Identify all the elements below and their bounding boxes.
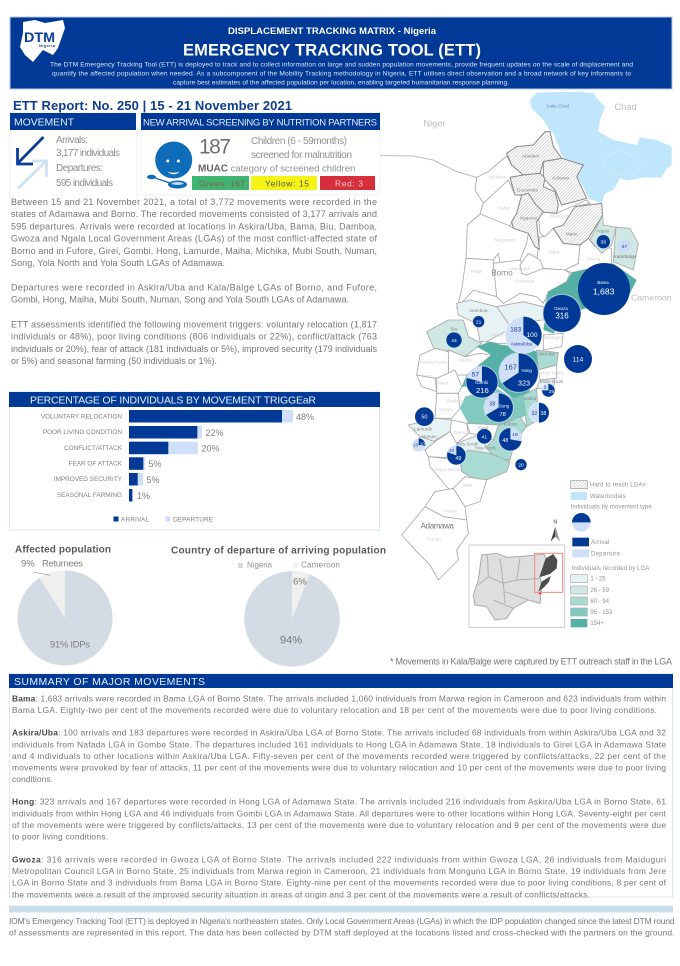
- circle: Fufore: [499, 428, 522, 451]
- circle: Damboa: [473, 316, 484, 327]
- LGA labels: Gubio: [498, 205, 511, 210]
- summary: Askira/Uba: conditions.: [12, 774, 53, 784]
- circle: Fufore: 48: [502, 438, 508, 444]
- row: poor living condition: POOR LIVING CONDITION: [43, 429, 122, 436]
- LGA labels: [426, 153, 637, 542]
- LGA labels: Jere: [527, 253, 537, 258]
- map: Borno and Adamawa: Numan: [422, 434, 437, 439]
- LGA labels: Kala/Balge: [614, 254, 637, 259]
- summary: Hong: of the movements were were triggered by conflicts/attacks, 13 per cent of the movements were due to voluntary relocation and 9 per cent of the movements were due: [12, 820, 666, 830]
- map: Borno and Adamawa: Damboa: [470, 308, 488, 313]
- map: Borno and Adamawa: Hawul: [459, 358, 471, 363]
- circle: Yola North: 20: [518, 462, 524, 467]
- body text: overview: Between 15 and 21 November 2021, a total of 3,772 movements were recorded in the: [11, 197, 377, 207]
- summary: Askira/Uba: movements were provoked by fear of attacks, 11 per cent of the movements were due to voluntary relocation and 10 per cent of the movements were due to poor living: [12, 762, 666, 772]
- body text: triggers: or 5%) and seasonal farming (50 individuals or 1%).: [11, 356, 217, 366]
- row: conflict/attack: [64, 442, 220, 454]
- 6% label: 6%: [293, 576, 307, 588]
- row: improved security: [54, 473, 160, 486]
- map: Borno and Adamawa: Guyuk: [439, 407, 453, 412]
- circle: Maiha: [529, 403, 549, 423]
- circle: Yola South: [447, 446, 466, 465]
- circle: Kala/Balge: [618, 239, 631, 253]
- map: Borno and Adamawa: Shani: [436, 380, 448, 385]
- circle: Ngala: [597, 235, 610, 248]
- map: Borno and Adamawa: Yola North: [474, 445, 496, 450]
- circle: Numan: [412, 438, 425, 452]
- circle: Song: 38: [489, 402, 495, 408]
- circle: Askira/Uba: [505, 317, 542, 353]
- screened caption: Children (6 - 59months): [251, 136, 347, 147]
- row: voluntary relocation: 48%: [296, 412, 314, 422]
- IDPs label: 91% IDPs: [50, 640, 90, 650]
- row: seasonal farming: [57, 489, 150, 502]
- badge: yellow: [251, 176, 317, 190]
- circle: Yola South: 10: [449, 448, 455, 453]
- LGA labels: Kaga: [471, 269, 483, 274]
- place labels: [421, 102, 672, 530]
- circle: Hong: [499, 353, 538, 392]
- chart legend: ARRIVAL: [121, 516, 149, 524]
- LGA labels: Marte: [566, 232, 578, 237]
- summary: Gwoza: LGA in Borno State and 3 individuals from Bama LGA in Borno State. Eighty-nine per cent of the movements recorded were due to poor living conditions, 8 per cent of: [12, 878, 667, 888]
- LGA labels: Mobbar: [489, 174, 506, 179]
- map: Borno and Adamawa: Jada: [462, 482, 472, 487]
- row: voluntary relocation: [41, 410, 314, 422]
- circle: Gombi: [466, 366, 498, 398]
- panel: country of departure pie: [171, 546, 386, 667]
- pie heading: Affected population: [15, 544, 111, 556]
- central and southern LGAs: [408, 300, 567, 502]
- badge: green: Green: 167: [199, 178, 245, 188]
- place labels: Niger: [423, 119, 446, 129]
- legend: individuals by LGA: 154+: [590, 621, 604, 627]
- report title: ETT Report: No. 250 | 15 - 21 November 2021: [13, 98, 292, 113]
- circle: Biu: 44: [451, 338, 457, 344]
- summary: Hong: [12, 797, 667, 842]
- row: improved security: IMPROVED SECURITY: [54, 476, 123, 483]
- footer note: of assessments are represented in this report. The data has been collected by DTM staff deployed at the locations listed and cross-checked with the partners on the ground.: [9, 927, 674, 937]
- place labels: Chad: [614, 102, 637, 112]
- circle: Michika: 114: [573, 357, 584, 364]
- map: Borno and Adamawa: Girei: [478, 425, 488, 430]
- row: fear of attack: [69, 457, 162, 470]
- summary: Gwoza: [12, 854, 667, 899]
- map footnote: * Movements in Kala/Balge were captured by ETT outreach staff in the LGA: [390, 656, 672, 666]
- circle: Mubi South: 29: [549, 389, 554, 394]
- panel: summary of major movements: [9, 674, 673, 899]
- summary: Askira/Uba: individuals from Nafada LGA in Gombe State. The departures included 161 individuals to Hong LGA in Adamawa State, 18 individuals to Girei LGA in Adamawa State: [12, 739, 666, 749]
- panel: movement trigger bar chart: [9, 392, 380, 530]
- screened caption: screened for malnutrition: [251, 150, 352, 161]
- circle: Gwoza: 316: [555, 311, 569, 320]
- returnees label: [21, 558, 83, 570]
- body text: overview: 595 departures. Arrivals were recorded at locations in Askira/Uba, Bama, Biu, Damboa,: [11, 221, 377, 231]
- header banner: [10, 17, 672, 89]
- LGA labels: Maiduguri: [510, 266, 530, 271]
- LGA labels: Dikwa: [588, 256, 601, 261]
- circle: Damboa: 21: [476, 320, 482, 326]
- map: Borno and Adamawa: [380, 92, 672, 580]
- body text: overview: [11, 197, 377, 268]
- circle: Fufore: 19: [512, 432, 518, 438]
- icon: arrival arrow: [18, 137, 44, 164]
- panel: affected population pie: [15, 544, 112, 666]
- chart heading: PERCENTAGE OF INDIVIDUALS BY MOVEMENT TRIGGEaR: [30, 394, 316, 406]
- legend: individuals by LGA: 60 - 94: [590, 599, 610, 605]
- legend: individuals by LGA: 1 - 25: [590, 577, 606, 583]
- row: fear of attack: 5%: [148, 459, 162, 469]
- circle: Girei: 41: [482, 434, 487, 440]
- place labels: Lake Chad: [547, 104, 570, 109]
- summary: Hong: to poor living conditions.: [12, 832, 108, 842]
- pie chart: [244, 571, 340, 667]
- row: fear of attack: FEAR OF ATTACK: [69, 460, 123, 468]
- icon: child face and spoon: [147, 142, 192, 188]
- summary: Hong: Hong: 323 arrivals and 167 departures were recorded in Hong LGA of Adamawa State. The arrivals included 216 individuals from Askira/Uba LGA in Borno State, 61: [12, 797, 666, 807]
- pie legend: Nigeria: [247, 560, 273, 570]
- body text: overview: states of Adamawa and Borno. The recorded movements consisted of 3,177 arrivals and: [11, 209, 377, 219]
- summary: Askira/Uba: Askira/Uba: 100 arrivals and 183 departures were recorded in Askira/Uba LGA of Borno State. The arrivals included 68 individuals from within Askira/Uba LGA and 32: [12, 728, 666, 738]
- summary: Askira/Uba: and 4 individuals to other locations within Askira/Uba LGA. Fifty-seven per cent of the movements recorded were triggered by conflicts/attacks, 22 per cent of the: [12, 751, 666, 761]
- screened count: 187: [199, 136, 231, 158]
- footer note: IOM's Emergency Tracking Tool (ETT) is deployed in Nigeria's northeastern states. Only Local Government Areas (LGAs) in which the IDP population changed since the latest DTM round: [9, 916, 675, 926]
- chart legend: DEPARTURE: [173, 516, 213, 524]
- LGA labels: Kukawa: [552, 176, 569, 181]
- legend: individuals by LGA: [571, 566, 649, 627]
- circle: Biu: [446, 332, 462, 348]
- summary: Bama: Bama: 1,683 arrivals were recorded in Bama LGA of Borno State. The arrivals included 1,060 individuals from Marwa region in Cameroon and 623 individuals from within: [12, 693, 666, 703]
- map: Borno and Adamawa: Yola South: [456, 442, 479, 447]
- screened caption: [251, 136, 352, 161]
- body text: overview: Borno and in Fufore, Girei, Gombi, Hong, Lamurde, Maiha, Michika, Mubi South, Numan,: [11, 246, 377, 256]
- badge: red: Red: 3: [335, 178, 363, 188]
- map: Borno and Adamawa: Madagali: [544, 335, 563, 340]
- header kicker: DISPLACEMENT TRACKING MATRIX - Nigeria: [228, 26, 437, 37]
- place labels: Borno: [491, 269, 513, 278]
- chart legend: [114, 516, 213, 524]
- circle: Hong: Hong: [521, 368, 532, 373]
- icon: north arrow: [551, 520, 560, 541]
- legend: movement type: Departure: [591, 551, 621, 557]
- badge: green: [192, 176, 249, 190]
- LGA labels: Mafa: [549, 250, 560, 255]
- circle: Gombi: 57: [472, 371, 479, 378]
- circle: Maiha: 32: [531, 411, 537, 417]
- map: Borno and Adamawa: Mayo-Belwa: [435, 467, 461, 472]
- body text: departures: Departures were recorded in Askira/Uba and Kala/Balge LGAs of Borno, and Fufore,: [11, 282, 377, 292]
- circle: Song: [484, 393, 513, 422]
- circle: Askira/Uba: 183: [510, 327, 522, 334]
- icon: north arrow: N: [553, 520, 557, 526]
- summary: Bama: [12, 693, 666, 715]
- LGA labels: Mongunu: [550, 214, 570, 219]
- circle: Mubi South: [542, 384, 555, 397]
- summary: Gwoza: Gwoza: 316 arrivals were recorded in Gwoza LGA of Borno State. The arrivals included 222 individuals from within Gwoza LGA, 26 individuals from Maiduguri: [12, 854, 666, 864]
- circle: Askira/Uba: Askira/Uba: [511, 342, 533, 347]
- badge: yellow: Yellow: 15: [265, 178, 309, 188]
- map: Borno and Adamawa: Chibok: [489, 332, 505, 337]
- intro text: The DTM Emergency Tracking Tool (ETT) is deployed to track and to collect information on large and sudden population movements, provide frequent updates on the scale of displacement and: [50, 62, 633, 68]
- circle: Bama: Bama: [597, 280, 609, 285]
- circle: Numan: 10: [413, 442, 419, 447]
- map: Borno and Adamawa: Mubi North: [540, 371, 563, 376]
- circle: Bama: 1,683: [593, 287, 615, 297]
- legend: hard to reach: [571, 481, 646, 489]
- footer note: [9, 916, 675, 937]
- proportional movement circles: [412, 235, 631, 470]
- LGA labels: Abadam: [522, 153, 539, 158]
- legend: individuals by LGA: Individuals recorded by LGA: [572, 566, 649, 572]
- southern Adamawa LGAs: [402, 477, 487, 580]
- circle: Yola North: [515, 459, 527, 470]
- panel: movement: [10, 113, 137, 201]
- circle: Kala/Balge: 37: [622, 244, 627, 250]
- LGA labels: Nganzai: [520, 215, 537, 220]
- body text: triggers: individuals or 48%), poor living conditions (806 individuals or 22%), conflict/attack (763: [11, 332, 377, 342]
- body text: triggers: individuals or 20%), fear of attack (181 individuals or 5%), improved security (179 individuals: [11, 344, 378, 354]
- movement figures: Departures:: [56, 163, 103, 174]
- circle: Gwoza: Gwoza: [554, 306, 568, 311]
- inset map of Nigeria: [469, 545, 565, 627]
- circle: Lamurde: [415, 407, 434, 426]
- row: seasonal farming: 1%: [137, 491, 150, 501]
- place labels: Cameroon: [631, 292, 672, 302]
- summary: Gwoza: the movements were a result of the improved security situation in areas of origin and 3 per cent of the movements were a result of conflicts/attacks.: [12, 889, 590, 899]
- LGA labels: Konduga: [516, 278, 535, 283]
- main title: EMERGENCY TRACKING TOOL (ETT): [183, 42, 481, 60]
- LGA labels: Guzamala: [517, 187, 538, 192]
- summary heading: SUMMARY OF MAJOR MOVEMENTS: [14, 676, 205, 688]
- intro text: capture best estimates of the affected population per location, enabling targeted humanitarian response planning.: [173, 80, 509, 86]
- circle: Girei: [477, 429, 492, 444]
- legend: movement type: Individuals by movement type: [571, 505, 652, 511]
- summary: Askira/Uba: [12, 728, 666, 784]
- logo: DTM Nigeria: Nigeria: [39, 43, 56, 48]
- intro text: quantify the affected population when needed. As a subcomponent of the Mobility Tracking methodology in Nigeria, ETT utilises direct observation and a broad network of key informants to: [52, 70, 631, 78]
- map legend: [469, 481, 652, 627]
- logo: DTM Nigeria: DTM: [24, 29, 55, 45]
- legend: hard to reach: Hard to reach LGAs: [590, 483, 646, 489]
- circle: Lamurde: 50: [421, 415, 427, 421]
- body text: departures: [11, 282, 377, 305]
- map: Borno and Adamawa: Demsa: [454, 430, 469, 435]
- movement figures: 3,177 individuals: [56, 148, 120, 159]
- map: Borno and Adamawa: Kwaya Kusar: [420, 359, 447, 364]
- intro text: [50, 62, 633, 86]
- lake chad and northern LGAs: [380, 92, 672, 310]
- circle: Michika: [564, 345, 592, 373]
- circle: Gombi: 216: [476, 386, 489, 395]
- circle: Bama: [578, 263, 630, 315]
- pie legend: Cameroon: [301, 560, 340, 570]
- movement figures: [56, 135, 120, 189]
- legend: individuals by LGA: 26 - 59: [590, 588, 610, 594]
- row: improved security: 5%: [146, 475, 160, 485]
- body text: overview: Song, Yola North and Yola South LGAs of Adamawa.: [11, 258, 225, 268]
- circle: Gwoza: [543, 294, 581, 332]
- legend: waterbodies: Waterbodies: [590, 494, 626, 500]
- circle: Hong: 167: [505, 363, 517, 372]
- circle: Ngala: 36: [601, 240, 606, 246]
- map: Borno and Adamawa: Ganye: [443, 508, 458, 513]
- summary: Gwoza: Metropolitan Council LGA in Borno State, 25 individuals from Marwa region in Cameroon, 21 individuals from Monguno LGA in Borno State, 19 individuals from Jere: [12, 866, 666, 876]
- circle: Askira/Uba: 100: [526, 332, 538, 339]
- circle: Mubi South: 9: [544, 385, 547, 390]
- returnees label: Returnees: [42, 558, 83, 570]
- circle: Maiha: 38: [540, 411, 546, 417]
- returnees label: 9%: [21, 558, 35, 570]
- summary: Hong: individuals from within Hong LGA and 46 individuals from Gombi LGA in Adamawa State. All departures were to other locations within Hong LGA. Seventy-eight per cent: [12, 808, 667, 818]
- map: Borno and Adamawa: Lamurde: [414, 426, 433, 431]
- 94% label: 94%: [280, 634, 302, 646]
- circle: Song: 78: [500, 412, 506, 418]
- LGA labels: Magumeri: [495, 238, 515, 243]
- map: Borno and Adamawa: Maiha: [524, 396, 537, 401]
- logo: DTM Nigeria: [20, 20, 65, 62]
- circle: Yola South: 49: [455, 456, 461, 462]
- body text: triggers: ETT assessments identified the following movement triggers: voluntary relocation (1,817: [11, 320, 377, 330]
- LGA labels: Toungo: [426, 537, 441, 542]
- nutrition heading: NEW ARRIVAL SCREENING BY NUTRITION PARTNERS: [143, 118, 377, 128]
- map: Borno and Adamawa: Bayo: [421, 374, 432, 379]
- map: Borno and Adamawa: Shelleng: [446, 399, 464, 404]
- badge: red: [320, 176, 375, 190]
- pie heading: Country of departure of arriving population: [171, 546, 386, 556]
- legend: movement type: [571, 505, 652, 557]
- map: Borno and Adamawa: Michika: [539, 351, 555, 356]
- row: poor living condition: 22%: [206, 428, 224, 438]
- movement heading: MOVEMENT: [14, 116, 75, 128]
- circle: Hong: 323: [518, 378, 530, 387]
- icon: departure arrow: [18, 161, 46, 188]
- row: poor living condition: [43, 426, 224, 438]
- row: seasonal farming: SEASONAL FARMING: [57, 492, 122, 499]
- row: conflict/attack: 20%: [202, 444, 220, 454]
- row: voluntary relocation: VOLUNTARY RELOCATION: [41, 414, 122, 420]
- body text: departures: Gombi, Hong, Maiha, Mubi South, Numan, Song and Yola South LGAs of Adamawa.: [11, 295, 349, 305]
- map: Borno and Adamawa: Fufore: [504, 421, 517, 426]
- MUAC caption: MUAC category of screened children: [198, 164, 355, 174]
- map: Borno and Adamawa: Mubi South: [540, 379, 564, 384]
- LGA labels: Ngala: [597, 229, 610, 234]
- panel: nutrition screening: [141, 113, 380, 195]
- row: conflict/attack: CONFLICT/ATTACK: [64, 445, 123, 452]
- divider band: [9, 906, 673, 912]
- movement figures: 595 individuals: [56, 178, 113, 189]
- legend: movement type: Arrival: [591, 540, 609, 546]
- place labels: Adamawa: [421, 521, 455, 530]
- circle: Gombi: Gombi: [475, 380, 488, 385]
- summary: Bama: Bama LGA. Eighty-two per cent of the movements recorded were due to voluntary relocation and 18 per cent of the movements were due to poor living conditions.: [12, 705, 657, 715]
- circle: Song: Song: [499, 404, 510, 409]
- body text: overview: Gwoza and Ngala Local Government Areas (LGAs) of the most conflict-affected state of: [11, 234, 377, 244]
- pie legend: [238, 560, 340, 570]
- circle: Numan: 10: [420, 442, 425, 447]
- body text: triggers: [11, 320, 378, 366]
- legend: individuals by LGA: 95 - 153: [590, 610, 613, 616]
- legend: waterbodies: [571, 492, 626, 500]
- movement figures: Arrivals:: [56, 135, 88, 146]
- pie chart: [18, 570, 112, 666]
- map: Borno and Adamawa: Biu: [451, 327, 458, 332]
